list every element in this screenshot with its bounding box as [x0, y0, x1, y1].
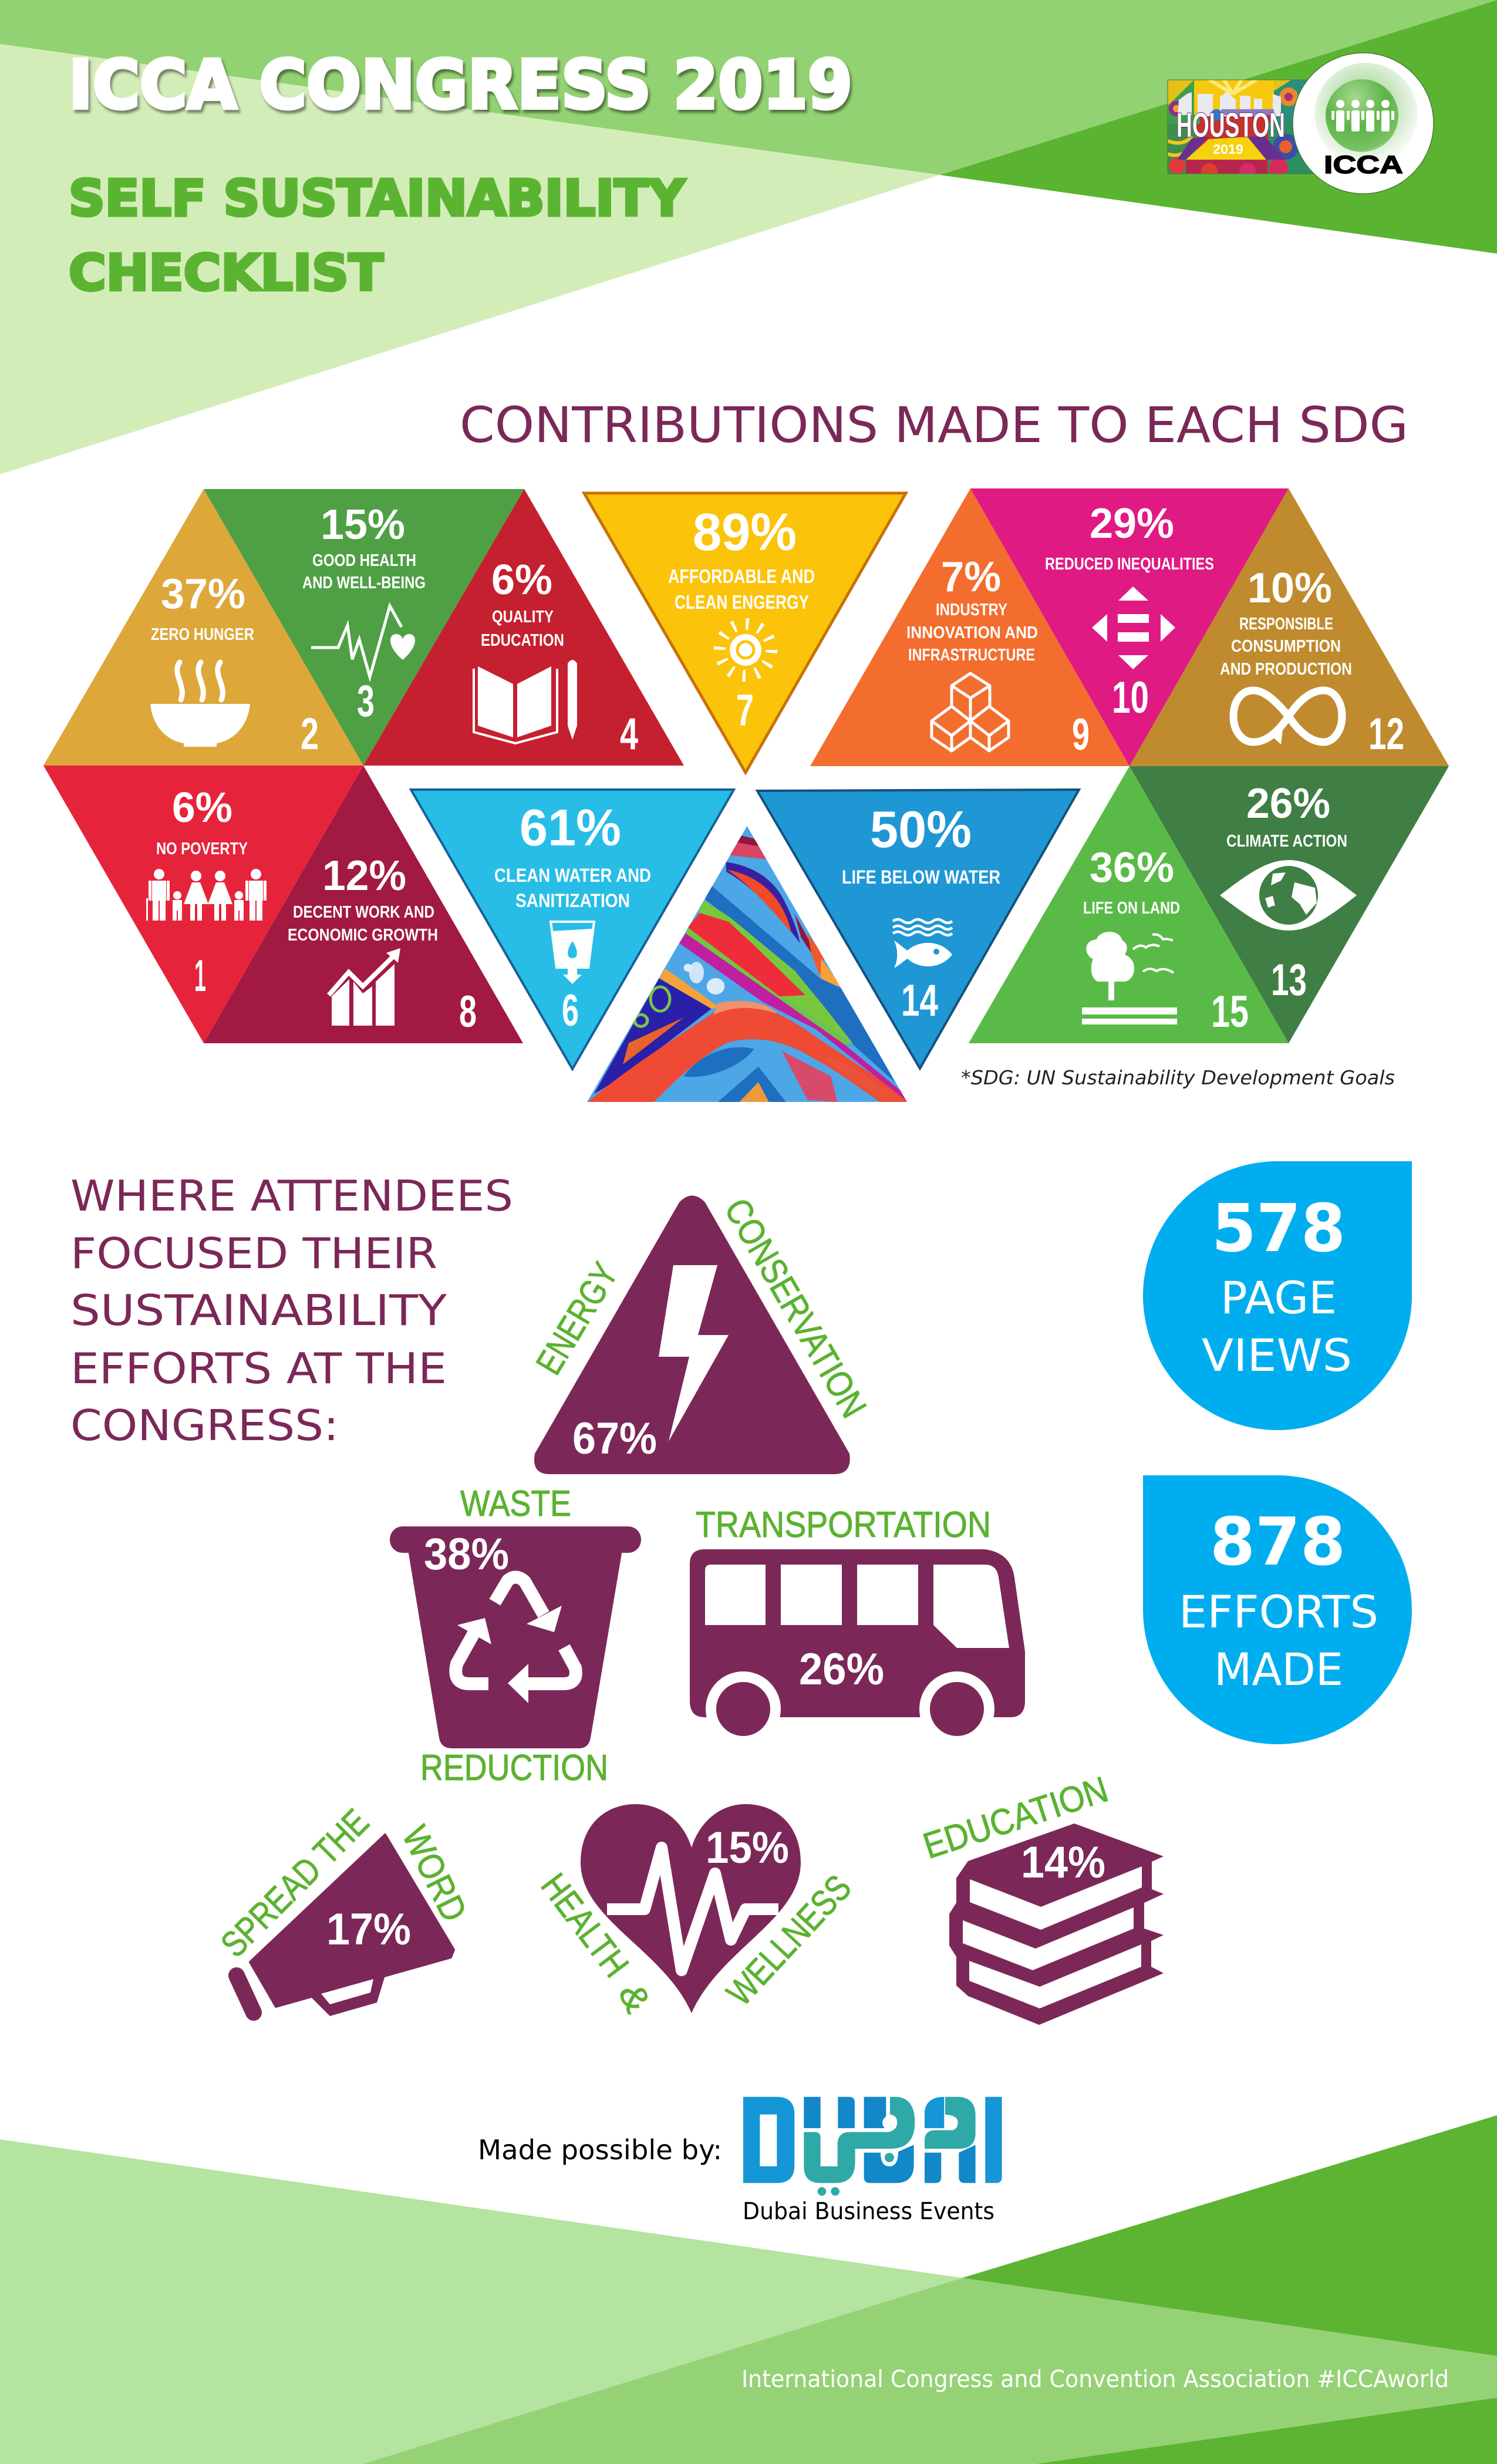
icon: education books: EDUCATION [918, 1769, 1113, 1867]
icon: waste reduction bin: REDUCTION [420, 1748, 608, 1788]
panel: SDG 13 climate action: 13 [1271, 955, 1307, 1005]
panel: SDG 12 responsible consumption: 10% [1248, 565, 1332, 612]
logo: ICCA: ICCA [1324, 151, 1403, 179]
panel: SDG 12 responsible consumption [1130, 488, 1449, 766]
subtitle line 1: SELF SUSTAINABILITY [69, 170, 686, 228]
panel: SDG 4 quality education [363, 489, 684, 766]
icon: infinity loop [1233, 690, 1342, 744]
icon: fish and waves [893, 919, 952, 968]
panel: SDG 9 industry [810, 488, 1130, 766]
panel: SDG 15 life on land: LIFE ON LAND [1083, 899, 1180, 918]
panel: SDG 6 clean water: CLEAN WATER AND [494, 865, 651, 886]
panel: SDG 14 life below water: LIFE BELOW WATER [842, 867, 1000, 888]
icon: water glass [551, 922, 594, 984]
icon: transportation bus: 26% [799, 1644, 884, 1694]
background: footer triangles [0, 2115, 1497, 2464]
footnote: *SDG: UN Sustainability Development Goals [961, 1066, 1395, 1089]
icon: book and pencil [474, 660, 577, 743]
icon: health and wellness heart: 15% [706, 1823, 789, 1873]
panel: SDG 14 life below water: 14 [901, 976, 938, 1026]
credit: Dubai Business Events: Dubai Business Events [743, 2198, 994, 2225]
panel: SDG 1 no poverty: 1 [194, 951, 206, 1001]
panel: SDG 7 affordable energy: 89% [693, 503, 797, 562]
panel: SDG 14 life below water: 50% [870, 800, 972, 858]
heading: where attendees focused: WHERE ATTENDEES [70, 1171, 513, 1221]
panel: SDG 4 quality education: 6% [491, 557, 552, 604]
heading: where attendees focused: CONGRESS: [70, 1401, 339, 1450]
panel: SDG 14 life below water [757, 790, 1079, 1068]
icon: health and wellness heart [533, 1804, 859, 2019]
icon: health and wellness heart: & [611, 1978, 659, 2019]
stat: page views: VIEWS [1202, 1329, 1352, 1381]
icon: education books [918, 1769, 1164, 2025]
panel: SDG 10 reduced inequalities [970, 488, 1289, 766]
icon: education books: 14% [1021, 1838, 1105, 1887]
icon: globe eye [1220, 860, 1357, 931]
icon: spread the word megaphone: WORD [394, 1820, 474, 1928]
panel: SDG 7 affordable energy: 7 [736, 686, 754, 736]
icon: health and wellness heart: WELLNESS [719, 1868, 859, 2014]
panel: SDG 6 clean water: 61% [520, 798, 621, 857]
stat: efforts made: 878 [1210, 1504, 1346, 1580]
stat: page views [1143, 1161, 1412, 1430]
panel: SDG 8 decent work: ECONOMIC GROWTH [288, 926, 438, 945]
icon: transportation bus [690, 1505, 1025, 1759]
panel: SDG 8 decent work [204, 766, 523, 1043]
panel: SDG 10 reduced inequalities: 10 [1112, 673, 1149, 723]
icon: transportation bus: TRANSPORTATION [696, 1505, 991, 1545]
panel: SDG 15 life on land [969, 766, 1289, 1043]
panel: SDG 7 affordable energy: CLEAN ENGERGY [675, 591, 809, 613]
panel: SDG 12 responsible consumption: RESPONSIBLE [1239, 615, 1333, 633]
icon: spread the word megaphone [213, 1802, 474, 2016]
stat: efforts made: MADE [1214, 1643, 1343, 1696]
icon: energy conservation [528, 1192, 874, 1474]
icon: spread the word megaphone: 17% [326, 1905, 411, 1954]
icon: waste reduction bin: 38% [424, 1529, 509, 1579]
panel: SDG 3 good health: 15% [321, 501, 405, 548]
logo: Dubai [743, 2097, 1002, 2196]
panel: SDG 6 clean water: SANITIZATION [515, 890, 630, 911]
panel: SDG 4 quality education: EDUCATION [481, 631, 564, 650]
stat: efforts made: EFFORTS [1179, 1586, 1378, 1638]
panel: SDG 8 decent work: 8 [459, 987, 477, 1037]
footer text: International Congress and Convention Association #ICCAworld [741, 2366, 1449, 2393]
icon: heartbeat [311, 606, 415, 677]
icon: energy conservation: CONSERVATION [716, 1192, 874, 1424]
logo: Houston 2019 [1168, 80, 1320, 180]
panel: SDG 9 industry: INFRASTRUCTURE [908, 646, 1035, 665]
heading: where attendees focused: FOCUSED THEIR [70, 1229, 437, 1278]
panel: SDG 12 responsible consumption: CONSUMPTION [1231, 637, 1341, 656]
stat: page views: PAGE [1220, 1272, 1337, 1324]
panel: SDG 3 good health: GOOD HEALTH [312, 551, 416, 570]
panel: SDG 2 zero hunger: 37% [161, 571, 245, 618]
logo: Houston 2019: HOUSTON [1176, 106, 1285, 144]
icon: growth chart [329, 948, 400, 1026]
panel: SDG 13 climate action [1130, 766, 1449, 1043]
artwork triangle [581, 822, 916, 1104]
panel: SDG 7 affordable energy [584, 493, 906, 773]
panel: SDG 3 good health: AND WELL-BEING [302, 574, 426, 592]
panel: SDG 8 decent work: DECENT WORK AND [293, 903, 434, 922]
logo: Houston 2019: 2019 [1213, 141, 1243, 157]
panel: SDG 4 quality education: 4 [620, 709, 638, 759]
icon: bowl [150, 662, 250, 747]
panel: SDG 3 good health [204, 489, 524, 766]
panel: SDG 6 clean water [411, 790, 734, 1069]
icon: spread the word megaphone: SPREAD THE [213, 1802, 377, 1965]
heading: where attendees focused: SUSTAINABILITY [70, 1286, 447, 1335]
heading: contributions: CONTRIBUTIONS MADE TO EACH SDG [460, 396, 1408, 454]
panel: SDG 12 responsible consumption: AND PRODUCTION [1220, 660, 1352, 679]
heading: where attendees focused: EFFORTS AT THE [70, 1344, 447, 1393]
title: ICCA CONGRESS 2019 [69, 46, 852, 124]
icon: sun [720, 624, 771, 676]
panel: SDG 4 quality education: QUALITY [492, 608, 554, 626]
stat: efforts made [1143, 1475, 1412, 1744]
panel: SDG 1 no poverty [43, 766, 363, 1043]
panel: SDG 15 life on land: 36% [1090, 844, 1174, 891]
panel: SDG 1 no poverty: 6% [172, 784, 232, 831]
panel: SDG 9 industry: INDUSTRY [936, 601, 1007, 619]
panel: SDG 2 zero hunger: 2 [301, 709, 319, 759]
icon: cubes [932, 673, 1009, 751]
panel: SDG 2 zero hunger: ZERO HUNGER [151, 625, 254, 644]
heading: where attendees focused [70, 1171, 513, 1450]
background: header triangles [0, 0, 1497, 474]
panel: SDG 10 reduced inequalities: REDUCED INEQUALITIES [1045, 555, 1214, 574]
icon: energy conservation: 67% [572, 1414, 657, 1464]
icon: waste reduction bin: WASTE [460, 1484, 571, 1524]
panel: SDG 15 life on land: 15 [1211, 987, 1249, 1037]
panel: SDG 2 zero hunger [43, 489, 363, 766]
panel: SDG 1 no poverty: NO POVERTY [156, 840, 248, 858]
icon: tree and birds [1082, 932, 1177, 1024]
panel: SDG 6 clean water: 6 [562, 986, 579, 1036]
logo: ICCA [1293, 53, 1434, 194]
icon: family [146, 869, 267, 921]
panel: SDG 13 climate action: 26% [1246, 780, 1330, 827]
subtitle line 2: CHECKLIST [69, 244, 383, 302]
panel: SDG 7 affordable energy: AFFORDABLE AND [668, 565, 815, 587]
icon: energy conservation: ENERGY [528, 1256, 626, 1381]
panel: SDG 8 decent work: 12% [322, 852, 406, 899]
panel: SDG 9 industry: 9 [1072, 710, 1090, 760]
panel: SDG 10 reduced inequalities: 29% [1090, 500, 1174, 547]
icon: equality arrows [1092, 586, 1175, 669]
icon: waste reduction bin [390, 1484, 641, 1788]
panel: SDG 13 climate action: CLIMATE ACTION [1226, 832, 1347, 851]
credit: made possible by: Made possible by: [478, 2134, 722, 2166]
icon: recycle arrows [456, 1577, 576, 1703]
icon: health and wellness heart: HEALTH [533, 1866, 636, 1985]
panel: SDG 9 industry: 7% [941, 554, 1001, 601]
panel: SDG 3 good health: 3 [357, 676, 375, 726]
panel: SDG 9 industry: INNOVATION AND [906, 623, 1038, 642]
panel: SDG 12 responsible consumption: 12 [1368, 709, 1404, 759]
stat: page views: 578 [1212, 1191, 1346, 1267]
